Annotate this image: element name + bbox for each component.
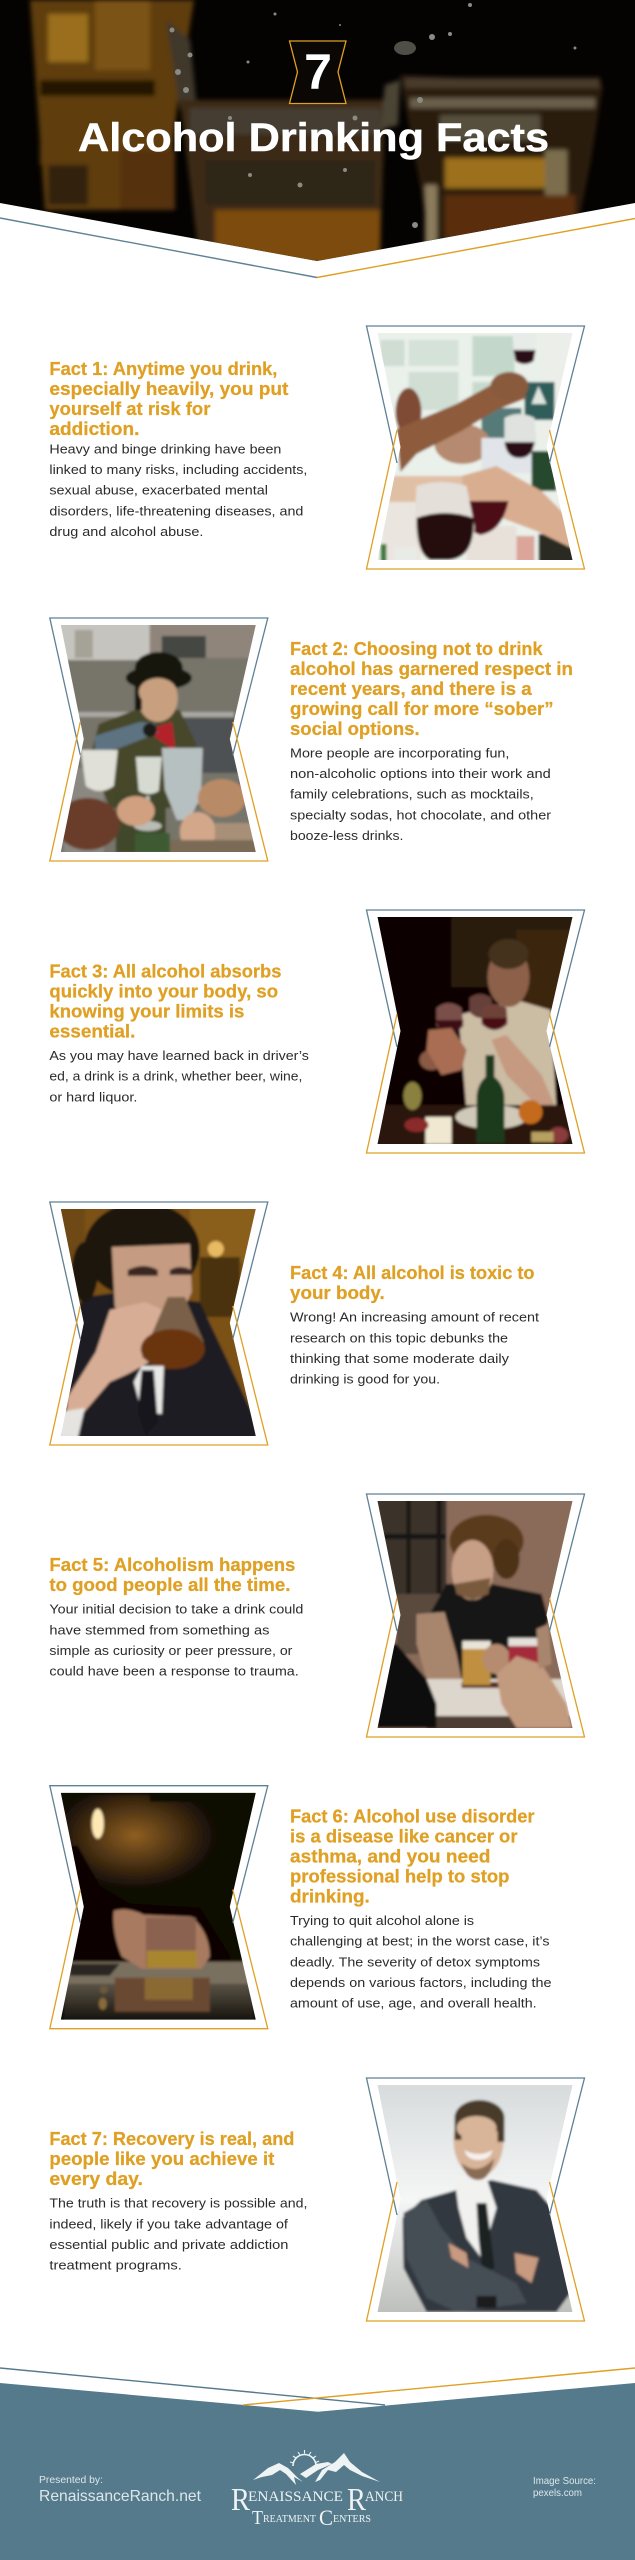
heading: Fact 5: Alcoholism happens (49, 1554, 295, 1575)
header photo: whiskey glasses (0, 0, 635, 285)
photo frame: businessman (366, 2078, 584, 2321)
body text: essential public and private addiction (49, 2237, 288, 2252)
heading: your body. (290, 1282, 385, 1303)
panel: fact 6 (50, 1781, 552, 2029)
heading: drinking. (290, 1886, 370, 1907)
heading: is a disease like cancer or (290, 1826, 518, 1847)
heading: essential. (49, 1021, 135, 1042)
logo: Renaissance Ranch Treatment Centers: ENTERS (333, 2514, 371, 2525)
header banner (0, 0, 635, 285)
heading: recent years, and there is a (290, 678, 532, 699)
heading (49, 358, 288, 439)
photo frame: man drinking (50, 1202, 268, 1445)
presented by (39, 2474, 202, 2505)
heading: Fact 6: Alcohol use disorder (290, 1806, 534, 1827)
body text: indeed, likely if you take advantage of (49, 2216, 288, 2231)
heading (49, 2128, 294, 2189)
footer stripe: blue (0, 2368, 385, 2405)
logo: Renaissance Ranch Treatment Centers: T (252, 2507, 263, 2529)
frame outline (50, 1202, 268, 1445)
frame outline (50, 618, 268, 861)
presented by: Presented by: (39, 2474, 103, 2486)
logo: Renaissance Ranch Treatment Centers: ENAISSANCE (248, 2489, 343, 2505)
panel: fact 3 (49, 910, 584, 1153)
body text: specialty sodas, hot chocolate, and other (290, 807, 552, 822)
body text: The truth is that recovery is possible and, (49, 2196, 307, 2211)
logo: Renaissance Ranch Treatment Centers (231, 2450, 403, 2530)
logo: Renaissance Ranch Treatment Centers: R (347, 2481, 367, 2517)
frame outline (366, 910, 584, 1153)
heading (49, 1554, 295, 1595)
body text: thinking that some moderate daily (290, 1351, 510, 1366)
image source (533, 2475, 596, 2499)
heading: every day. (49, 2168, 143, 2189)
body text: treatment programs. (49, 2258, 182, 2273)
icon: sun and mountains (253, 2450, 380, 2485)
photo: wine toast (378, 333, 572, 560)
chevron stripe: gold (317, 218, 635, 278)
body text: sexual abuse, exacerbated mental (49, 483, 268, 498)
body text (49, 1602, 303, 1679)
body text: More people are incorporating fun, (290, 745, 509, 760)
panel: fact 2 (50, 618, 573, 861)
heading: professional help to stop (290, 1866, 509, 1887)
body text: booze-less drinks. (290, 828, 403, 843)
heading: people like you achieve it (49, 2148, 274, 2169)
body text: drinking is good for you. (290, 1372, 440, 1387)
photo frame: dinner toast (366, 910, 584, 1153)
body text: Heavy and binge drinking have been (49, 441, 281, 456)
body text: have stemmed from something as (49, 1622, 270, 1637)
body text (290, 745, 552, 843)
body text (290, 1310, 539, 1387)
heading: Fact 4: All alcohol is toxic to (290, 1262, 534, 1283)
photo: man drinking whiskey (60, 1209, 256, 1436)
photo: man with hat and toast (60, 625, 256, 852)
body text: Wrong! An increasing amount of recent (290, 1310, 539, 1325)
body text: challenging at best; in the worst case, it’s (290, 1934, 550, 1949)
heading (290, 1806, 534, 1907)
body text: amount of use, age, and overall health. (290, 1996, 537, 2011)
body text: Your initial decision to take a drink could (49, 1602, 303, 1617)
badge: number 7 (290, 41, 346, 104)
body text (49, 2196, 307, 2273)
photo: hand holding whiskey glass (60, 1792, 256, 2020)
logo: Renaissance Ranch Treatment Centers: REATMENT (263, 2514, 317, 2525)
heading: knowing your limits is (49, 1001, 244, 1022)
ice chunk (35, 224, 142, 285)
frame outline (366, 2078, 584, 2321)
logo: Renaissance Ranch Treatment Centers: R (231, 2481, 251, 2517)
logo: Renaissance Ranch Treatment Centers: C (319, 2505, 333, 2530)
photo frame: man with hat (50, 618, 268, 861)
splash droplets (170, 3, 576, 228)
chevron stripe: blue (0, 218, 317, 278)
frame outline (50, 1786, 268, 2029)
body text: deadly. The severity of detox symptoms (290, 1954, 541, 1969)
body text: simple as curiosity or peer pressure, or (49, 1643, 293, 1658)
body text: or hard liquor. (49, 1089, 137, 1104)
body text (49, 1048, 309, 1104)
footer band (0, 2383, 635, 2560)
body text: disorders, life-threatening diseases, and (49, 503, 303, 518)
panel: fact 4 (50, 1202, 539, 1445)
heading (49, 961, 281, 1042)
heading: Fact 7: Recovery is real, and (49, 2128, 294, 2149)
photo frame: wine toast (366, 326, 584, 569)
photo: man with beer at bar (378, 1501, 572, 1728)
presented by: RenaissanceRanch.net (39, 2488, 202, 2505)
panel: fact 5 (49, 1494, 586, 1737)
frame outline (366, 326, 584, 569)
image source: Image Source: (533, 2475, 596, 2487)
photo: couple toasting at dinner (378, 917, 572, 1144)
heading: to good people all the time. (49, 1574, 290, 1595)
footer (0, 2368, 635, 2560)
photo: smiling man in suit (378, 2085, 572, 2312)
body text: could have been a response to trauma. (49, 1664, 299, 1679)
heading: quickly into your body, so (49, 981, 278, 1002)
body text: linked to many risks, including accidents, (49, 462, 307, 477)
badge: number 7: 7 (304, 44, 332, 100)
body text: Trying to quit alcohol alone is (290, 1913, 475, 1928)
frame outline (366, 1494, 584, 1737)
heading: Fact 3: All alcohol absorbs (49, 961, 281, 982)
photo frame: hand and glass (50, 1781, 268, 2029)
body text: As you may have learned back in driver’s (49, 1048, 309, 1063)
title: Alcohol Drinking Facts (78, 116, 549, 160)
body text: research on this topic debunks the (290, 1330, 508, 1345)
heading: Fact 1: Anytime you drink, (49, 358, 277, 379)
heading (290, 638, 573, 739)
body text: depends on various factors, including the (290, 1975, 552, 1990)
body text: non-alcoholic options into their work and (290, 766, 551, 781)
heading (290, 1262, 534, 1303)
heading: asthma, and you need (290, 1846, 490, 1867)
logo: Renaissance Ranch Treatment Centers: ANCH (365, 2489, 403, 2505)
heading: growing call for more “sober” (290, 698, 554, 719)
panel: fact 1 (49, 326, 584, 569)
image source: pexels.com (533, 2487, 582, 2499)
body text: family celebrations, such as mocktails, (290, 787, 534, 802)
heading: yourself at risk for (49, 398, 210, 419)
heading: social options. (290, 718, 420, 739)
footer stripe: gold (243, 2368, 635, 2405)
heading: Fact 2: Choosing not to drink (290, 638, 543, 659)
body text: ed, a drink is a drink, whether beer, wine, (49, 1069, 302, 1084)
heading: alcohol has garnered respect in (290, 658, 573, 679)
body text (290, 1913, 552, 2011)
heading: addiction. (49, 418, 139, 439)
panel: fact 7 (49, 2078, 584, 2321)
body text (49, 441, 307, 539)
heading: especially heavily, you put (49, 378, 288, 399)
photo frame: man in bar (366, 1494, 586, 1737)
body text: drug and alcohol abuse. (49, 524, 203, 539)
